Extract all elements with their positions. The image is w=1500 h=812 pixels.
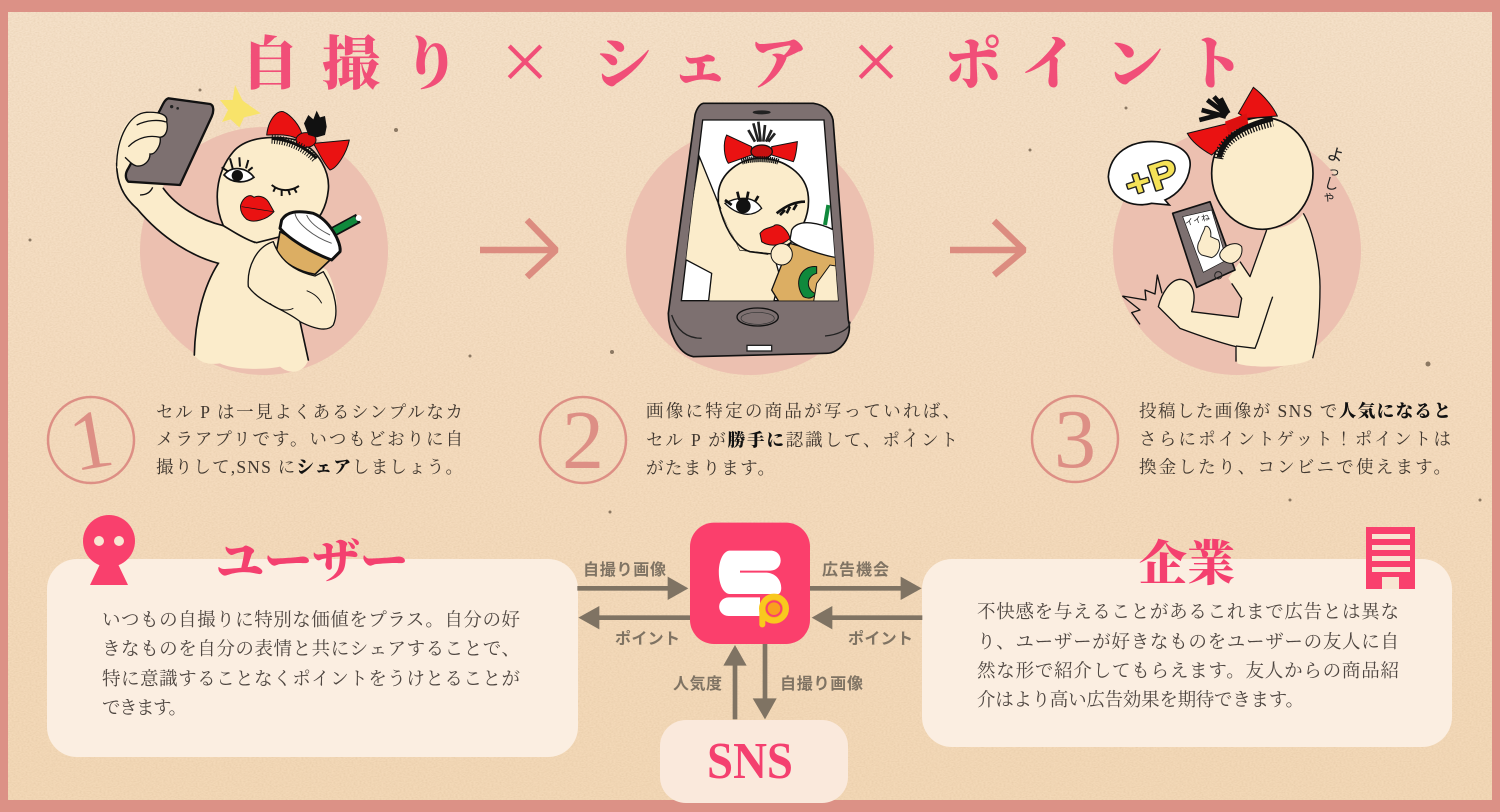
user text: いつもの自撮りに特別な価値をプラス。自分の好 <box>102 610 520 631</box>
arm <box>683 157 780 303</box>
step 1 text <box>156 402 463 477</box>
title: ェ <box>671 32 729 97</box>
arrow: step 1 to 2 <box>480 220 556 277</box>
hand holding cup <box>248 242 336 329</box>
icon: user <box>83 515 135 585</box>
title: 撮 <box>322 32 380 97</box>
character body <box>117 113 337 372</box>
step 1 badge <box>48 391 134 490</box>
exclamation: よ <box>1325 144 1346 166</box>
bow <box>1187 123 1233 155</box>
hand <box>117 112 167 180</box>
exclamation: っ <box>1327 163 1342 180</box>
title: ポ <box>944 32 1002 97</box>
panel: company <box>922 527 1452 747</box>
flow labels: ポイント <box>615 630 680 648</box>
phone screen <box>681 120 838 301</box>
icon: star <box>220 85 261 127</box>
title: × <box>501 15 549 109</box>
head <box>1212 117 1313 229</box>
company text: 然な形で紹介してもらえます。友人からの商品紹 <box>977 661 1399 682</box>
step 2 badge: 2 <box>562 394 604 487</box>
exclamation: し <box>1322 175 1340 195</box>
flow arrows <box>577 577 922 719</box>
title: ン <box>1105 32 1163 97</box>
body and arm <box>1158 213 1320 367</box>
phone <box>1173 202 1235 287</box>
step 2 text: がたまります。 <box>646 458 775 478</box>
company text <box>977 602 1399 711</box>
flow labels: 人気度 <box>673 674 722 693</box>
head <box>718 158 809 253</box>
flow labels: 広告機会 <box>822 560 889 579</box>
title: 自 <box>241 32 299 97</box>
step 3 text: 換金したり、コンビニで使えます。 <box>1139 457 1451 477</box>
bow <box>267 111 302 138</box>
company heading: 企業 <box>1139 538 1235 591</box>
character head <box>217 137 329 243</box>
like label: イイね！ <box>1184 210 1219 228</box>
P mark <box>762 597 786 621</box>
phone <box>126 98 213 185</box>
user text: できます。 <box>102 699 187 719</box>
user text <box>102 610 520 719</box>
title: ア <box>749 32 807 97</box>
step 3 badge: 3 <box>1054 393 1096 486</box>
step 2 text <box>646 401 960 478</box>
title <box>241 15 1244 109</box>
flow labels: 自撮り画像 <box>583 560 666 579</box>
title: ト <box>1186 32 1244 97</box>
icon: building <box>1366 527 1415 589</box>
impact burst <box>1122 275 1162 324</box>
title: シ <box>593 32 651 97</box>
face <box>725 198 762 214</box>
title: × <box>852 15 900 109</box>
step 2 badge <box>540 394 626 487</box>
illustration: step 1 selfie <box>117 85 388 375</box>
step 1 text: メラアプリです。いつもどおりに自 <box>156 429 463 449</box>
step 2 text: セル P が勝手に認識して、ポイント <box>646 430 958 450</box>
fringe <box>272 138 317 158</box>
bubble text: +P <box>1120 150 1183 206</box>
step 3 text <box>1139 401 1451 477</box>
illustration: step 3 posting <box>1108 87 1361 375</box>
home button <box>737 308 778 326</box>
flow labels <box>583 560 913 693</box>
thumb icon <box>1198 226 1220 258</box>
step 1 badge: 1 <box>62 391 120 490</box>
company text: 介はより高い広告効果を期待できます。 <box>977 690 1304 711</box>
panel: user <box>47 515 578 757</box>
flow labels: 自撮り画像 <box>780 674 863 693</box>
exclamation: ゃ <box>1321 189 1337 205</box>
arrow: step 2 to 3 <box>950 221 1024 275</box>
panel: SNS <box>660 720 848 803</box>
top knot <box>304 111 327 137</box>
app icon <box>690 523 810 644</box>
exclamation <box>1315 144 1349 205</box>
title: イ <box>1021 32 1079 97</box>
drink cup <box>332 218 358 233</box>
SNS label: SNS <box>707 733 793 790</box>
illustration: step 2 phone <box>626 103 874 375</box>
face <box>224 169 254 182</box>
cup on screen <box>772 243 837 303</box>
step 3 text: さらにポイントゲット！ポイントは <box>1139 429 1451 449</box>
step 3 text: 投稿した画像が SNS で人気になると <box>1139 401 1451 421</box>
charging port <box>747 345 772 351</box>
user heading: ユーザー <box>216 537 408 589</box>
phone body <box>668 103 849 357</box>
step 2 text: 画像に特定の商品が写っていれば、 <box>646 401 960 421</box>
speech bubble <box>1108 142 1190 205</box>
user text: きなものを自分の表情と共にシェアすることで、 <box>102 639 520 660</box>
title: り <box>402 32 460 97</box>
user text: 特に意識することなくポイントをうけとることが <box>102 669 520 690</box>
step 1 text: 撮りして,SNS にシェアしましょう。 <box>156 457 463 477</box>
hair and bow <box>748 122 775 142</box>
S mark <box>719 551 781 594</box>
step 1 text: セル P は一見よくあるシンプルなカ <box>156 402 463 422</box>
flow labels: ポイント <box>848 630 913 648</box>
company text: り、ユーザーが好きなものをユーザーの友人に自 <box>977 632 1399 653</box>
hair <box>1199 97 1228 120</box>
company text: 不快感を与えることがあるこれまで広告とは異な <box>977 602 1399 623</box>
step 3 badge <box>1032 393 1118 486</box>
hand on phone <box>1220 244 1242 263</box>
